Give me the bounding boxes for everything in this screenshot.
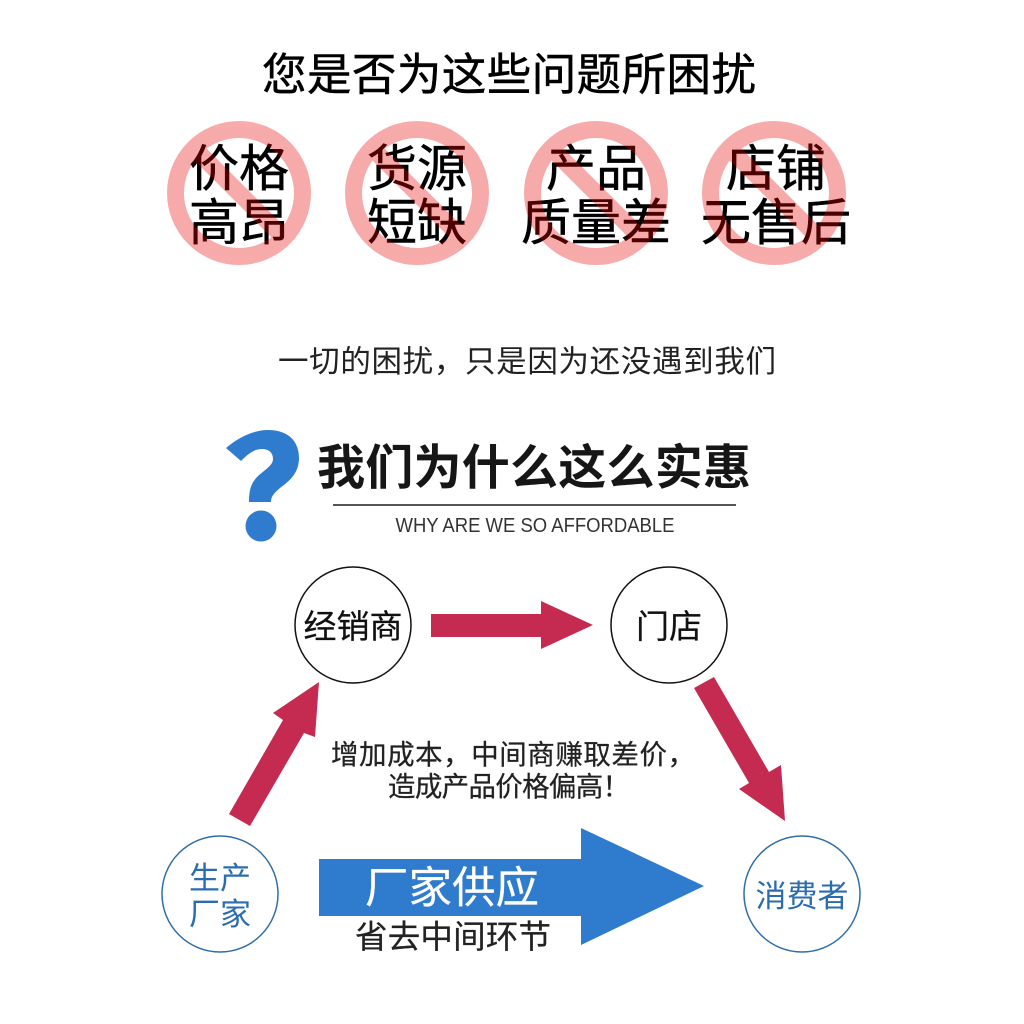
arrow: producer to distributor (229, 682, 319, 826)
badge: supply shortage: 货源 (367, 141, 467, 197)
badge: supply shortage (354, 130, 480, 256)
heading: why so affordable: 我们为什么这么实惠 (317, 442, 751, 495)
node: manufacturer (162, 836, 278, 952)
node: store: 门店 (636, 608, 702, 645)
arrow: direct factory supply: 厂家供应 (365, 865, 539, 913)
node: consumer: 消费者 (756, 879, 848, 914)
English subheading: WHY ARE WE SO AFFORDABLE (396, 515, 674, 537)
panel: problem badges (176, 130, 851, 256)
badge: high price: 价格 (189, 141, 289, 197)
divider line (333, 504, 736, 506)
badge: no after-sales (701, 130, 851, 256)
badge: high price (176, 130, 302, 256)
arrow: store to consumer (694, 677, 785, 821)
badge: no after-sales: 无售后 (701, 195, 851, 251)
node: distributor (295, 567, 411, 683)
callout: middleman cost: 造成产品价格偏高！ (388, 771, 630, 802)
arrow: distributor to store (431, 601, 593, 649)
callout: middleman cost: 增加成本，中间商赚取差价， (331, 739, 695, 770)
node: manufacturer: 生产 (189, 861, 251, 896)
icon: question mark (226, 430, 299, 542)
badge: poor quality: 产品 (546, 141, 646, 197)
node: store (611, 567, 727, 683)
node: manufacturer: 厂家 (189, 897, 251, 932)
callout: middleman cost (331, 739, 695, 802)
badge: high price: 高昂 (189, 195, 289, 251)
badge: poor quality (521, 130, 671, 256)
subtitle: 一切的困扰，只是因为还没遇到我们 (278, 345, 776, 379)
node: distributor: 经销商 (304, 608, 402, 645)
badge: no after-sales: 店铺 (726, 141, 826, 197)
arrow: direct factory supply (319, 828, 704, 955)
title: 您是否为这些问题所困扰 (262, 51, 756, 100)
badge: poor quality: 质量差 (521, 195, 671, 251)
badge: supply shortage: 短缺 (367, 195, 467, 251)
arrow: direct factory supply: 省去中间环节 (355, 919, 551, 955)
node: consumer (744, 836, 860, 952)
